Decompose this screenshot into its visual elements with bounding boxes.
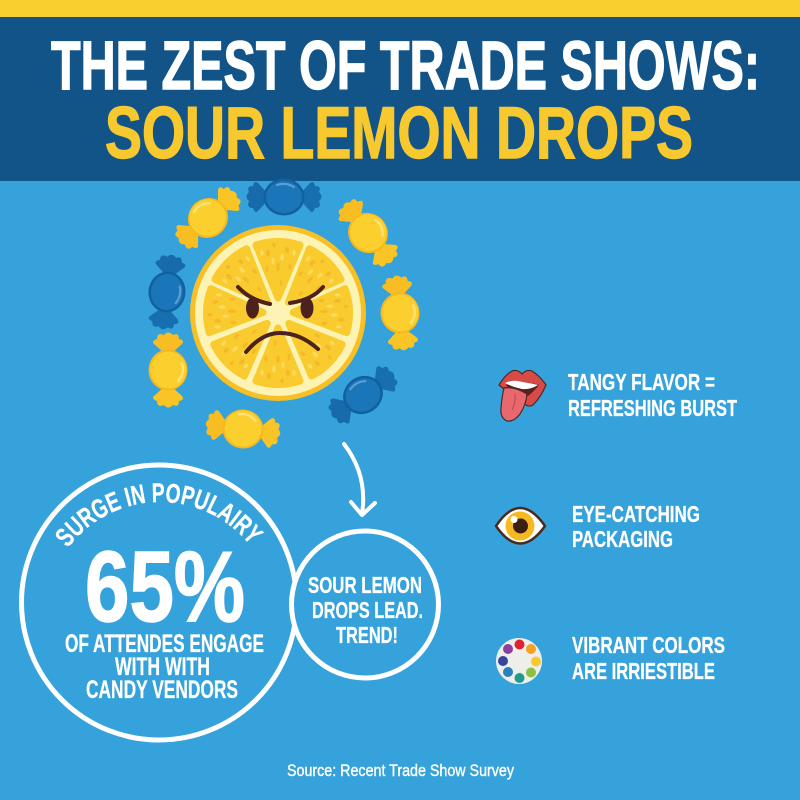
label: vibrant colors: ARE IRRIESTIBLE bbox=[572, 658, 715, 684]
label: tangy flavor bbox=[568, 369, 737, 421]
label: eye-catching: EYE-CATCHING bbox=[572, 501, 700, 527]
top yellow bar bbox=[0, 0, 800, 17]
lemon slice with angry face bbox=[190, 225, 366, 401]
trend text: TREND! bbox=[336, 622, 398, 648]
source line: Source: Recent Trade Show Survey bbox=[287, 761, 514, 780]
stat number: 65% bbox=[85, 531, 245, 643]
candy ring bbox=[144, 178, 423, 454]
candy: blue top bbox=[246, 178, 322, 216]
label: tangy flavor: REFRESHING BURST bbox=[568, 395, 737, 421]
angry face bbox=[238, 287, 323, 352]
candy: yellow left bbox=[148, 332, 188, 408]
icon: colour palette bbox=[496, 638, 542, 684]
candy: yellow right bbox=[377, 274, 423, 352]
candy: yellow bottom bbox=[203, 404, 283, 454]
label: vibrant colors: VIBRANT COLORS bbox=[572, 632, 725, 658]
trend text: DROPS LEAD. bbox=[312, 597, 423, 623]
candy: yellow top-right bbox=[330, 191, 406, 275]
stat description: CANDY VENDORS bbox=[86, 676, 238, 704]
icon: tongue and lips bbox=[499, 370, 546, 421]
header band bbox=[0, 17, 800, 181]
trend text bbox=[308, 572, 423, 648]
stat description bbox=[65, 630, 264, 704]
label: tangy flavor: TANGY FLAVOR = bbox=[568, 369, 715, 395]
icon: eye bbox=[496, 508, 545, 544]
big stat circle bbox=[19, 462, 296, 742]
arrow bbox=[344, 444, 375, 515]
trend text: SOUR LEMON bbox=[308, 572, 422, 598]
label: eye-catching: PACKAGING bbox=[572, 526, 673, 552]
candy: yellow top-left bbox=[167, 178, 249, 258]
stat description: WITH WITH bbox=[115, 653, 210, 681]
curved heading: SURGE IN POPULAIRY bbox=[56, 483, 264, 546]
candy: blue bottom-right bbox=[322, 358, 404, 432]
small trend circle bbox=[292, 531, 438, 678]
stat description: OF ATTENDES ENGAGE bbox=[65, 630, 264, 658]
candy: blue left bbox=[144, 253, 190, 331]
label: eye-catching bbox=[572, 501, 700, 552]
label: vibrant colors bbox=[572, 632, 725, 684]
